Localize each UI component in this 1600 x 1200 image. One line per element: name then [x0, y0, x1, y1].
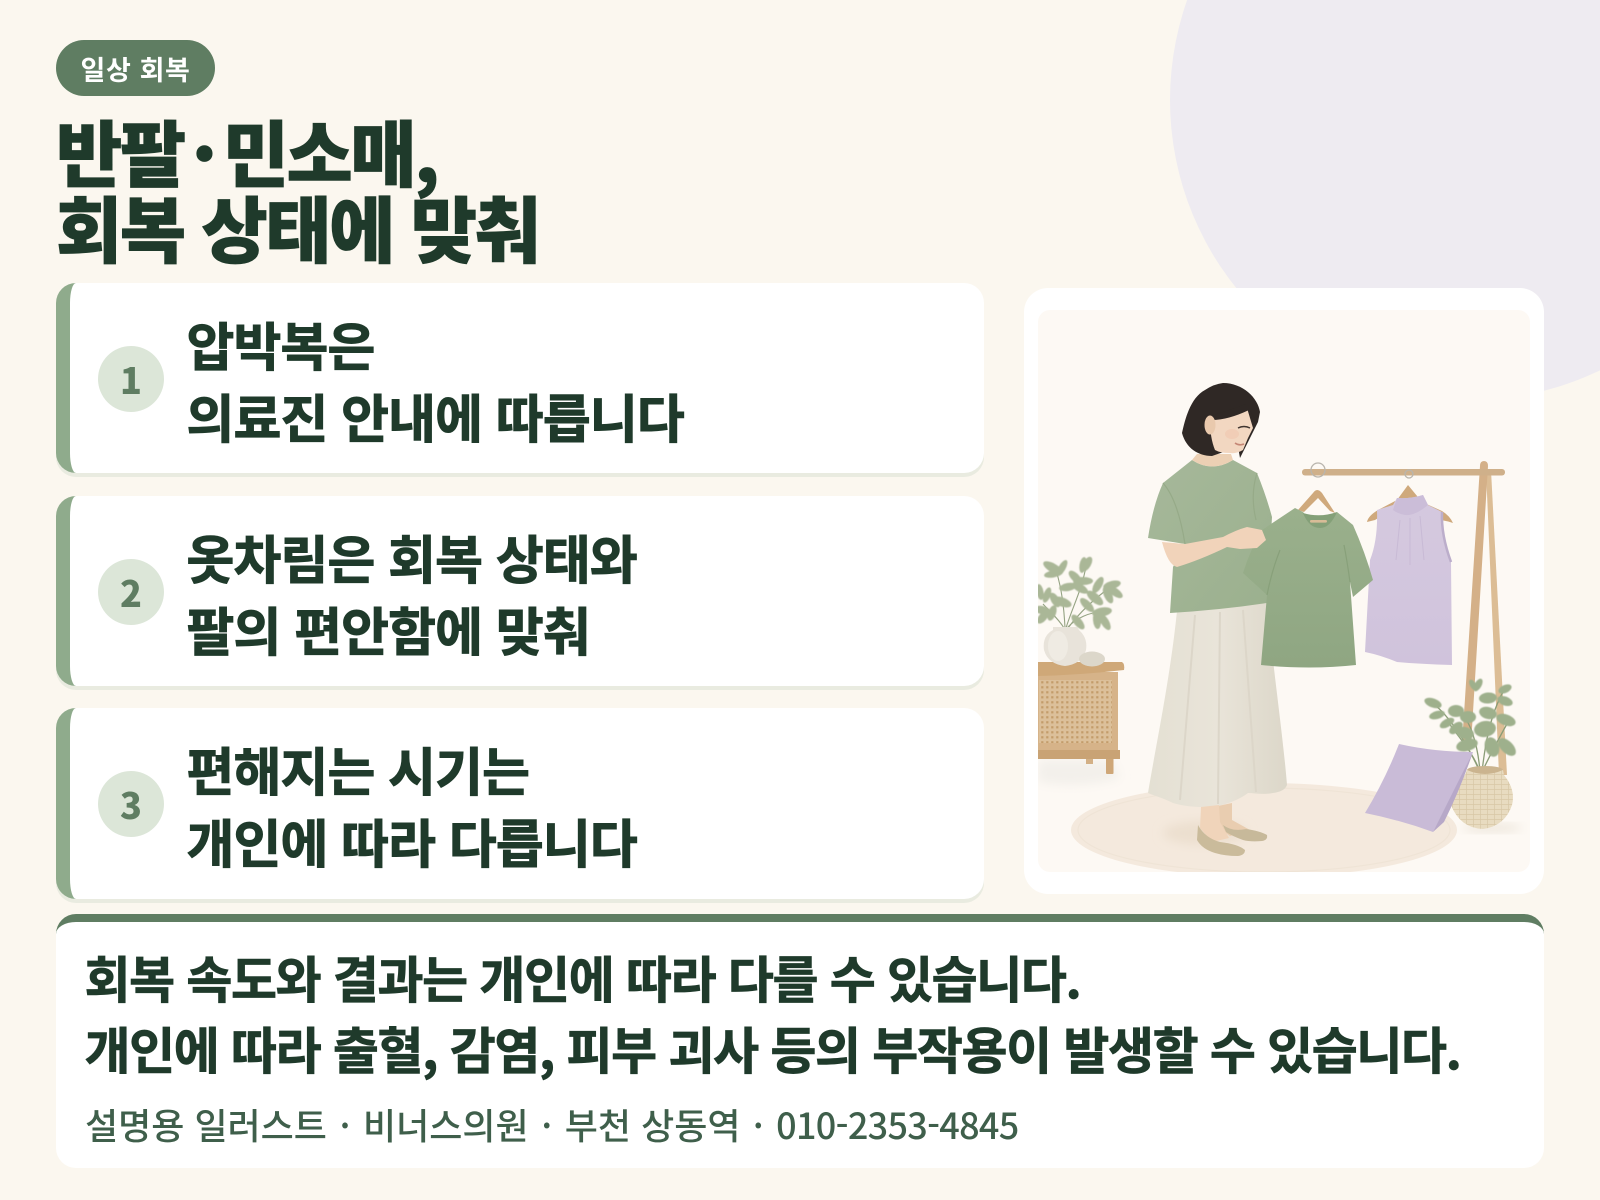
number badge 2 [98, 559, 164, 625]
disclaimer text: 회복 속도와 결과는 개인에 따라 다를 수 있습니다. [84, 941, 1080, 1013]
number badge 2: 2 [120, 566, 142, 618]
panel: point 2 [56, 496, 984, 686]
badge: category pill [56, 40, 215, 96]
woman's legs and shoes [1197, 803, 1267, 856]
text: point 1: 의료진 안내에 따릅니다 [186, 378, 684, 452]
disclaimer text: 개인에 따라 출혈, 감염, 피부 괴사 등의 부작용이 발생할 수 있습니다. [84, 1012, 1461, 1084]
source line: 설명용 일러스트 · 비너스의원 · 부천 상동역 · 010-2353-4845 [85, 1098, 1019, 1150]
text: point 1: 압박복은 [186, 306, 374, 381]
woman's head and hair [1182, 383, 1260, 466]
text: point 2: 옷차림은 회복 상태와 [186, 519, 637, 594]
panel: point 3 [56, 708, 984, 899]
panel: illustration card [1024, 288, 1544, 894]
number badge 1 [98, 346, 164, 412]
rug [1071, 783, 1457, 877]
text: point 2 [186, 519, 637, 666]
number badge 3 [98, 771, 164, 837]
title: 반팔·민소매, [56, 97, 437, 202]
text: point 2: 팔의 편안함에 맞춰 [186, 590, 590, 666]
number badge 1: 1 [120, 353, 142, 405]
text: point 3: 편해지는 시기는 [186, 731, 529, 806]
illustration: woman choosing short-sleeve and sleeveless tops [1038, 310, 1530, 872]
woman's arm and hand [1162, 527, 1266, 567]
cabinet with vases and plant [1033, 555, 1125, 785]
disclaimer text [84, 941, 1461, 1084]
decorative circle: lavender [1170, 0, 1600, 400]
title [56, 97, 538, 278]
panel: disclaimer [56, 914, 1544, 1168]
text: point 1 [186, 306, 684, 452]
number badge 3: 3 [120, 778, 142, 830]
panel: point 1 [56, 283, 984, 473]
badge: category pill: 일상 회복 [81, 49, 190, 88]
text: point 3: 개인에 따라 다릅니다 [186, 802, 637, 878]
clothes rack [1302, 461, 1507, 775]
woman's skirt [1148, 603, 1287, 807]
woman's short-sleeve shirt [1148, 460, 1272, 613]
text: point 3 [186, 731, 638, 878]
held short-sleeve shirt on hanger [1243, 490, 1373, 668]
plant in woven basket [1423, 677, 1522, 832]
title: 회복 상태에 맞춰 [56, 173, 538, 278]
sleeveless lavender top on hanger [1365, 485, 1453, 665]
lavender cushion [1365, 744, 1473, 832]
